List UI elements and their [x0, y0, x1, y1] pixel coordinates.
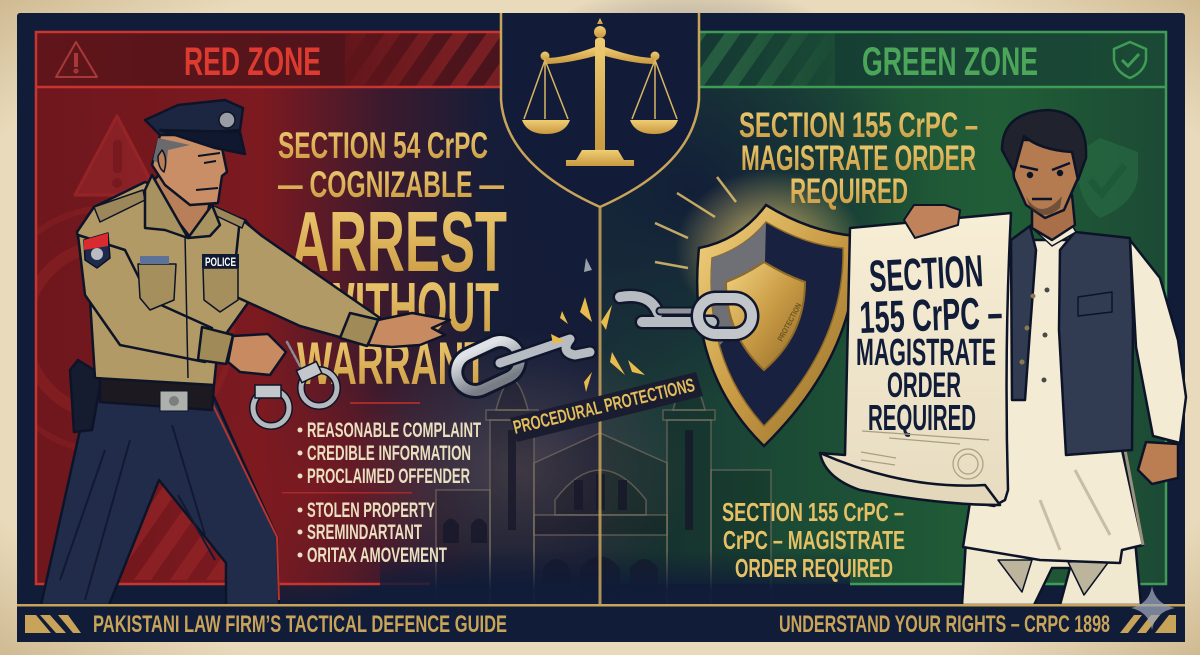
document text: REQUIRED [868, 397, 976, 438]
icon: scales [522, 18, 678, 166]
bullet list: arrest grounds: ORITAX AMOVEMENT [307, 544, 447, 567]
icon: header shield [1114, 42, 1146, 78]
text block: section 155 bottom: SECTION 155 CrPC – [722, 497, 904, 527]
document scroll [820, 205, 1011, 506]
hair [1002, 110, 1086, 180]
bullet list: arrest grounds: SREMINDARTANT [307, 521, 422, 544]
text block: section 155 heading: REQUIRED [790, 172, 908, 211]
panel: red zone [34, 30, 500, 600]
collar and placket buttons [1030, 218, 1076, 246]
text block: section 54 heading: WARRANT [297, 330, 487, 397]
center divider line [598, 205, 602, 605]
document text: MAGISTRATE [856, 332, 996, 374]
head [152, 135, 227, 205]
head [1011, 140, 1082, 218]
central shield with scales of justice [501, 13, 699, 207]
collar [145, 175, 188, 238]
text block: section 54 heading: SECTION 54 CrPC [278, 125, 488, 166]
heading: red zone: RED ZONE [184, 40, 321, 84]
text block: section 155 heading: SECTION 155 CrPC – [739, 106, 978, 145]
illustration: citizen with document [962, 110, 1186, 605]
extended hand [368, 313, 450, 347]
text block: section 54 heading: ARREST [291, 195, 507, 290]
bullet list: arrest grounds: STOLEN PROPERTY [307, 499, 435, 522]
heading: green zone: GREEN ZONE [862, 40, 1038, 84]
right chevrons [1120, 615, 1176, 633]
illustration: police officer [41, 100, 450, 605]
header band [699, 32, 1166, 88]
text block: section 54 heading: — COGNIZABLE — [278, 164, 504, 205]
neck [150, 170, 210, 237]
icon: protection shield [655, 170, 865, 446]
belt [100, 378, 214, 410]
fist [1138, 442, 1178, 484]
right sleeve [1130, 240, 1186, 443]
watermark star [1131, 586, 1175, 630]
shirt body [77, 182, 256, 385]
footer text left: PAKISTANI LAW FIRM’S TACTICAL DEFENCE GUIDE [93, 611, 507, 638]
neck [1032, 195, 1075, 240]
broken chain right [620, 296, 752, 334]
hand on document [904, 205, 960, 238]
vest right [1059, 232, 1133, 455]
vest left [1011, 226, 1036, 400]
document text: ORDER [887, 366, 961, 405]
ribbon: procedural protections: PROCEDURAL PROTECTIONS [511, 375, 697, 439]
kurta [963, 240, 1143, 563]
text block: section 155 bottom: ORDER REQUIRED [735, 553, 893, 583]
police tag [202, 254, 239, 269]
bullet list: arrest grounds [282, 402, 481, 567]
footer bar [17, 604, 1185, 642]
court building silhouette [350, 330, 850, 610]
police tag: POLICE [205, 257, 236, 269]
trousers [41, 385, 279, 605]
broken chain left [450, 335, 590, 397]
document text [856, 245, 1003, 438]
text block: section 155 bottom [722, 497, 905, 583]
epaulettes [94, 190, 145, 222]
header band [36, 32, 502, 88]
text block: section 54 heading: WITHOUT [318, 268, 499, 346]
text block: section 155 bottom: CrPC – MAGISTRATE [723, 525, 905, 555]
icon: shield watermark [1078, 138, 1138, 218]
holster [70, 360, 102, 432]
document text: 155 CrPC – [859, 287, 1003, 343]
shalwar [962, 540, 1141, 605]
bullet list: arrest grounds: CREDIBLE INFORMATION [307, 442, 471, 465]
icon: handcuffs [253, 342, 337, 426]
left chevrons [25, 615, 81, 633]
icon: protection shield: PROTECTION [776, 301, 804, 343]
warning watermark [38, 114, 235, 580]
gripping hand [228, 334, 286, 375]
document text: SECTION [868, 245, 984, 302]
sleeve badge [84, 233, 110, 268]
text block: section 54 heading [278, 125, 507, 397]
cap [145, 100, 243, 135]
panel: green zone [450, 0, 1166, 584]
text block: section 155 heading [739, 106, 978, 211]
sparks [551, 258, 645, 392]
bullet list: arrest grounds: PROCLAIMED OFFENDER [307, 465, 470, 488]
bullet list: arrest grounds: REASONABLE COMPLAINT [307, 419, 481, 442]
text block: section 155 heading: MAGISTRATE ORDER [741, 139, 976, 178]
ribbon: procedural protections [510, 372, 703, 442]
shirt pockets [138, 264, 238, 312]
lower arm [78, 235, 212, 362]
extended arm [232, 218, 380, 345]
icon: warning triangle [56, 42, 97, 77]
